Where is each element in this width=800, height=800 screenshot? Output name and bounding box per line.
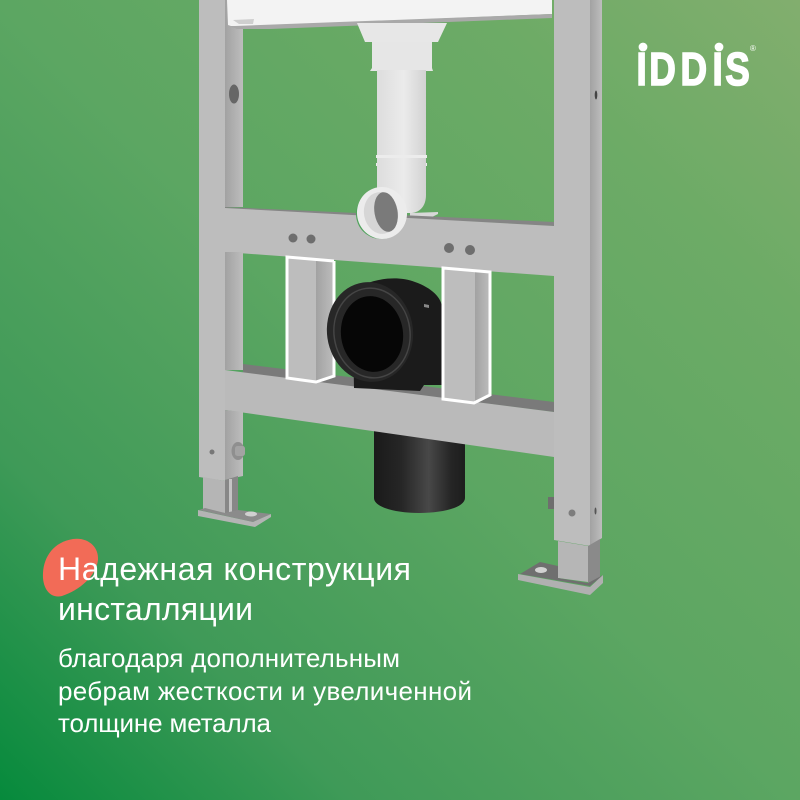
cistern underside xyxy=(227,0,552,42)
black drain pipe xyxy=(374,430,465,513)
heading xyxy=(58,551,411,627)
bolt xyxy=(548,497,554,509)
cistern outlet flange xyxy=(357,23,447,42)
pipe outlet ring xyxy=(353,183,411,243)
left adjustable foot xyxy=(198,476,271,527)
frame: top crossbar xyxy=(225,207,554,276)
body text: ребрам жесткости и увеличенной xyxy=(58,676,472,706)
right adjustable foot xyxy=(518,539,603,595)
frame: right post xyxy=(548,0,602,546)
bolt xyxy=(232,442,244,460)
registered mark: ® xyxy=(750,44,756,53)
white flush pipe xyxy=(370,42,438,218)
body text xyxy=(58,643,472,738)
body text: толщине металла xyxy=(58,708,272,738)
body text: благодаря дополнительным xyxy=(58,643,400,673)
heading: Надежная конструкция xyxy=(58,551,411,587)
heading: инсталляции xyxy=(58,591,253,627)
black elbow fitting xyxy=(320,277,442,391)
frame: lower crossbar xyxy=(225,364,554,457)
highlighted rib: left xyxy=(287,257,334,382)
red accent blob xyxy=(43,539,98,596)
highlighted rib: right xyxy=(443,268,490,403)
logo: iDDIS: IDDIS xyxy=(636,43,750,95)
frame: left post xyxy=(199,0,245,481)
